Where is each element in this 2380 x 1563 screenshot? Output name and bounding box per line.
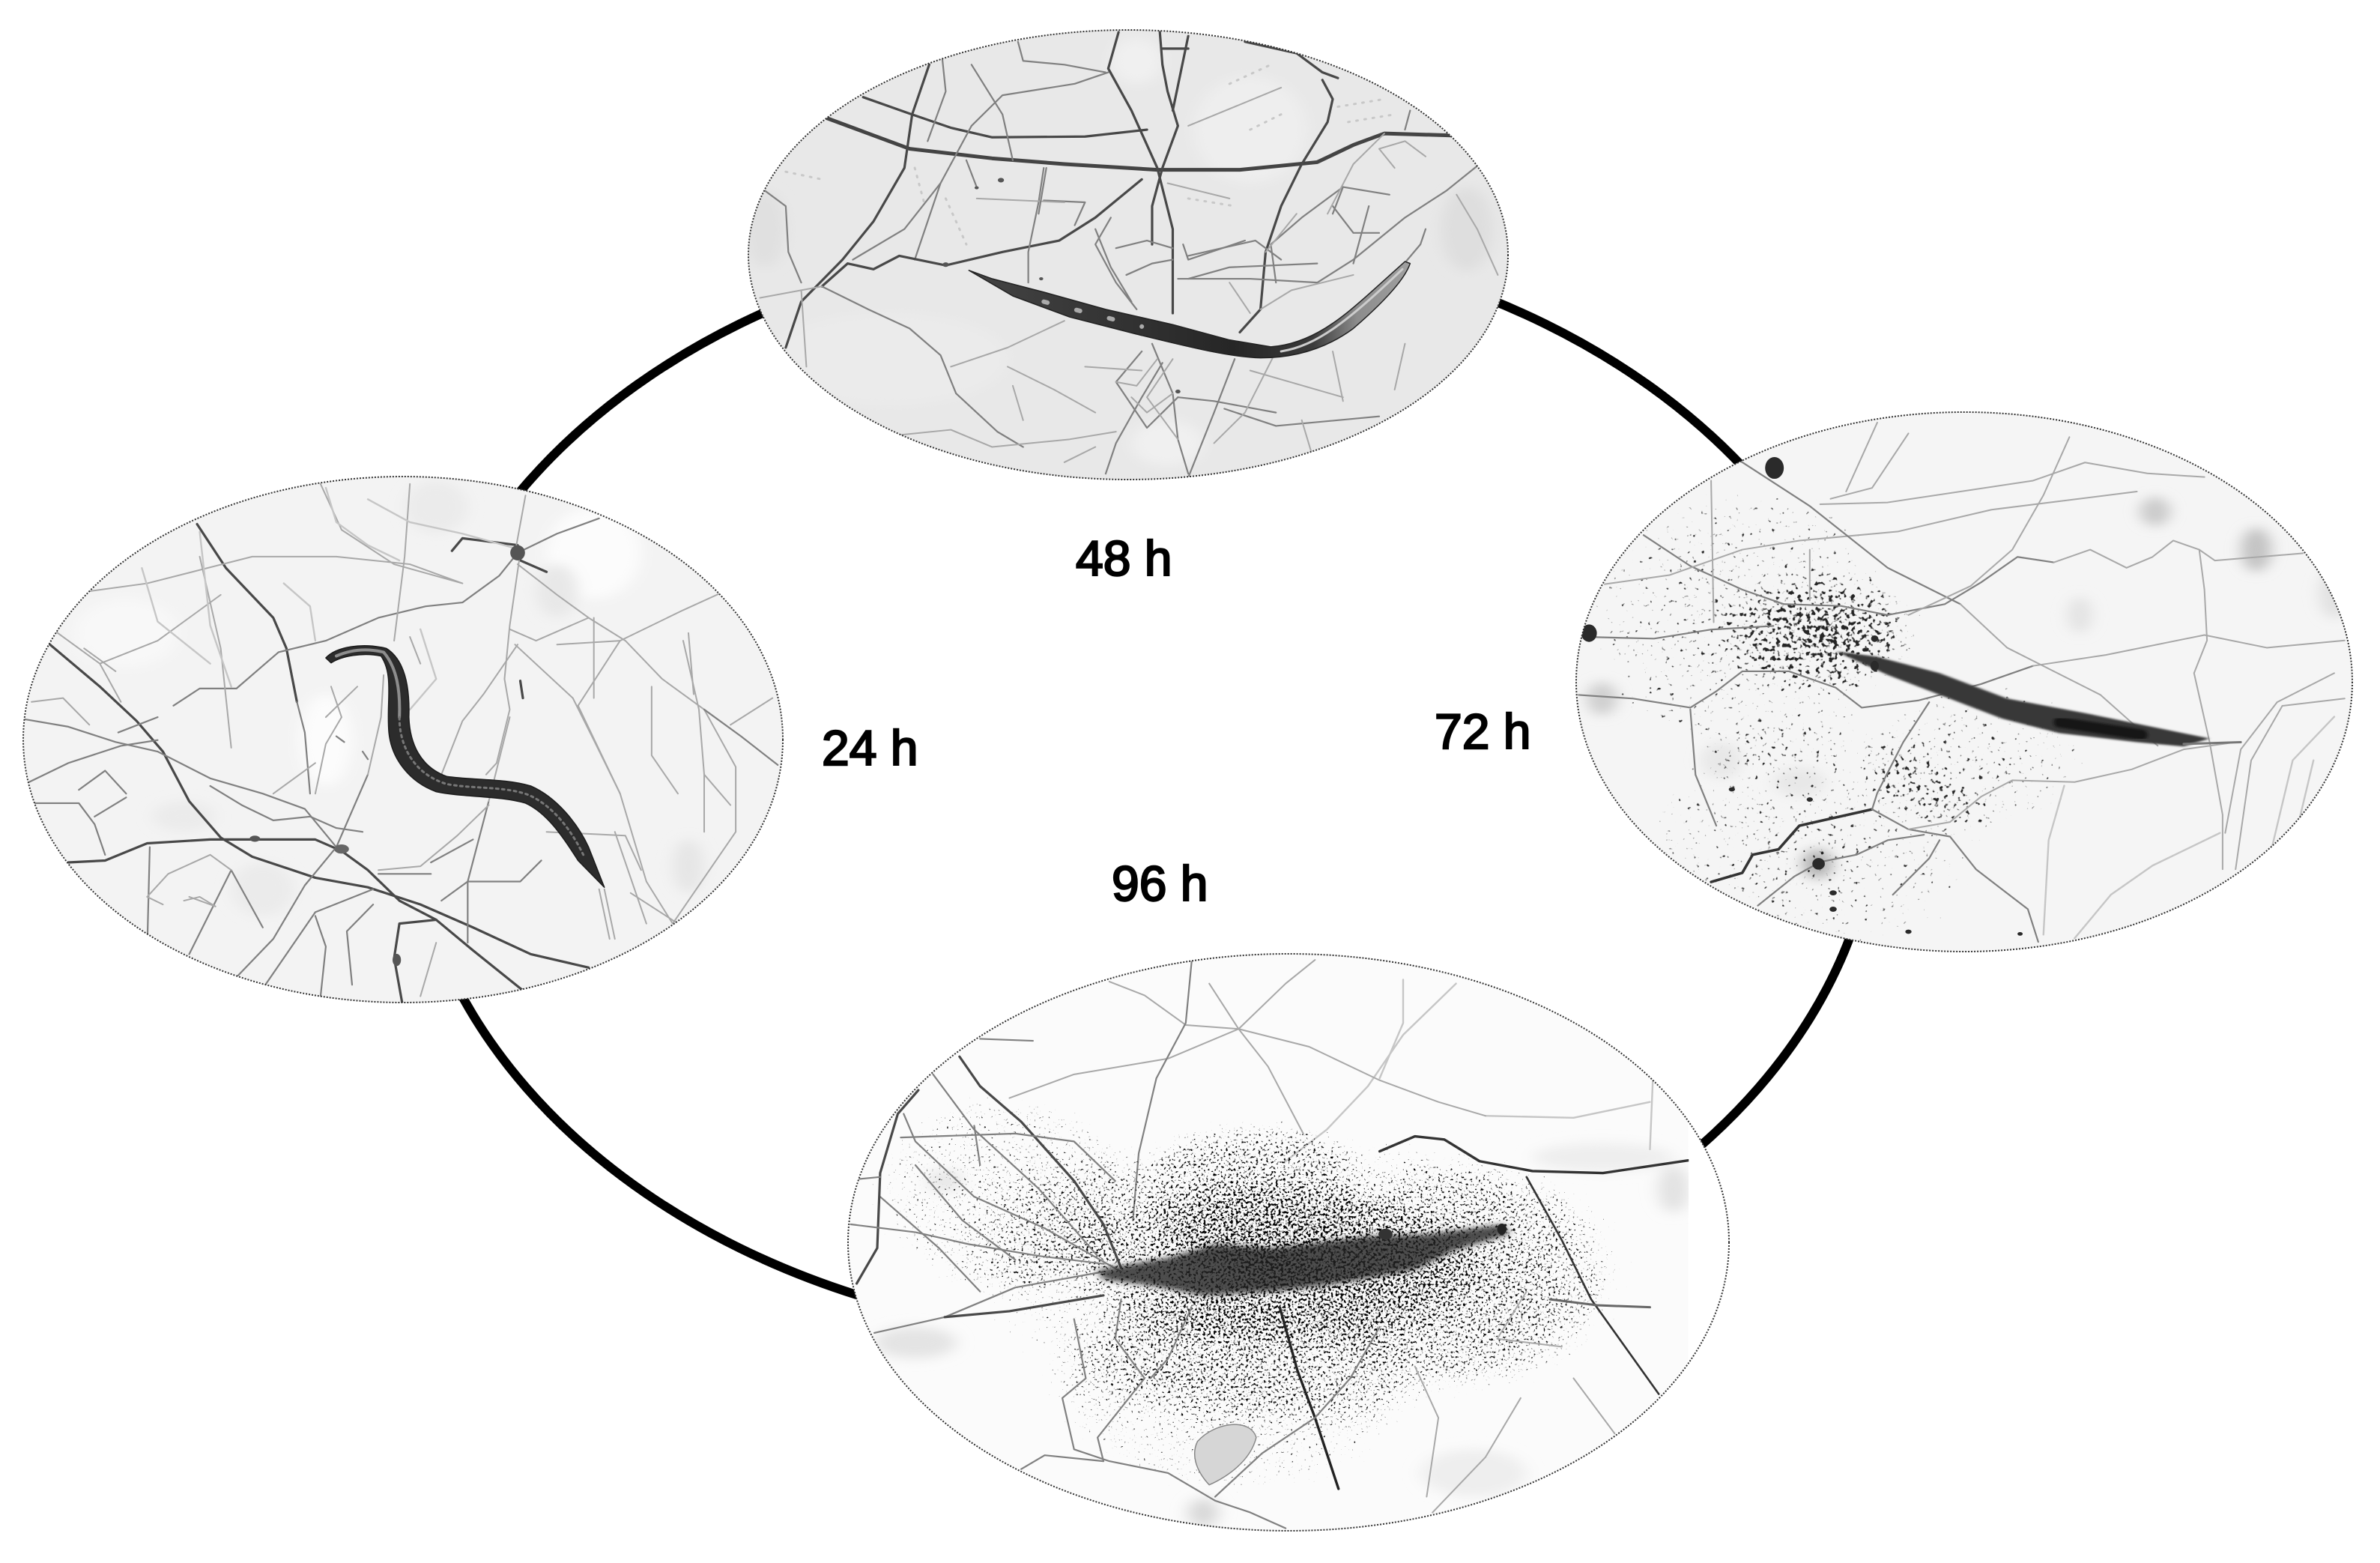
degraded worm body (1097, 1224, 1509, 1296)
label: 48 h: 48 h (1076, 530, 1172, 586)
24 h dotted outline (23, 477, 783, 1003)
72 h dotted outline (1576, 412, 2352, 952)
24 h hyphal network and worm (24, 480, 778, 1002)
label: 24 h: 24 h (822, 720, 918, 776)
collapsed cell (1195, 1424, 1256, 1485)
96 h image backdrop (848, 954, 1729, 1531)
nematode worm (326, 646, 605, 887)
panel: 48 h micrograph (745, 30, 1508, 480)
panel: 24 h micrograph (23, 477, 783, 1003)
48 h hyphal network and worm (745, 32, 1498, 477)
label: 96 h: 96 h (1112, 856, 1208, 911)
48 h dotted outline (748, 30, 1508, 480)
96 h spore cloud (872, 1097, 1632, 1493)
panel: 96 h micrograph (847, 953, 1730, 1532)
panel: 72 h micrograph (1566, 412, 2352, 967)
worm body (1835, 651, 2210, 746)
worm pale gut segments (1044, 302, 1142, 327)
96 h dotted outline (848, 954, 1729, 1531)
24 h image backdrop (23, 477, 783, 1003)
label: 72 h: 72 h (1435, 704, 1530, 759)
dark debris clumps (1581, 457, 2023, 936)
worm shadow halo (326, 646, 605, 887)
96 h hyphal network, spore cloud and worm (850, 959, 1705, 1529)
72 h scattered spores (1587, 495, 2083, 941)
nematode worm (969, 261, 1410, 358)
72 h hyphal network, spores and worm (1566, 423, 2350, 967)
cycle ring connecting the four stages (407, 234, 1878, 1338)
72 h image backdrop (1576, 412, 2352, 952)
48 h image backdrop (748, 30, 1508, 480)
